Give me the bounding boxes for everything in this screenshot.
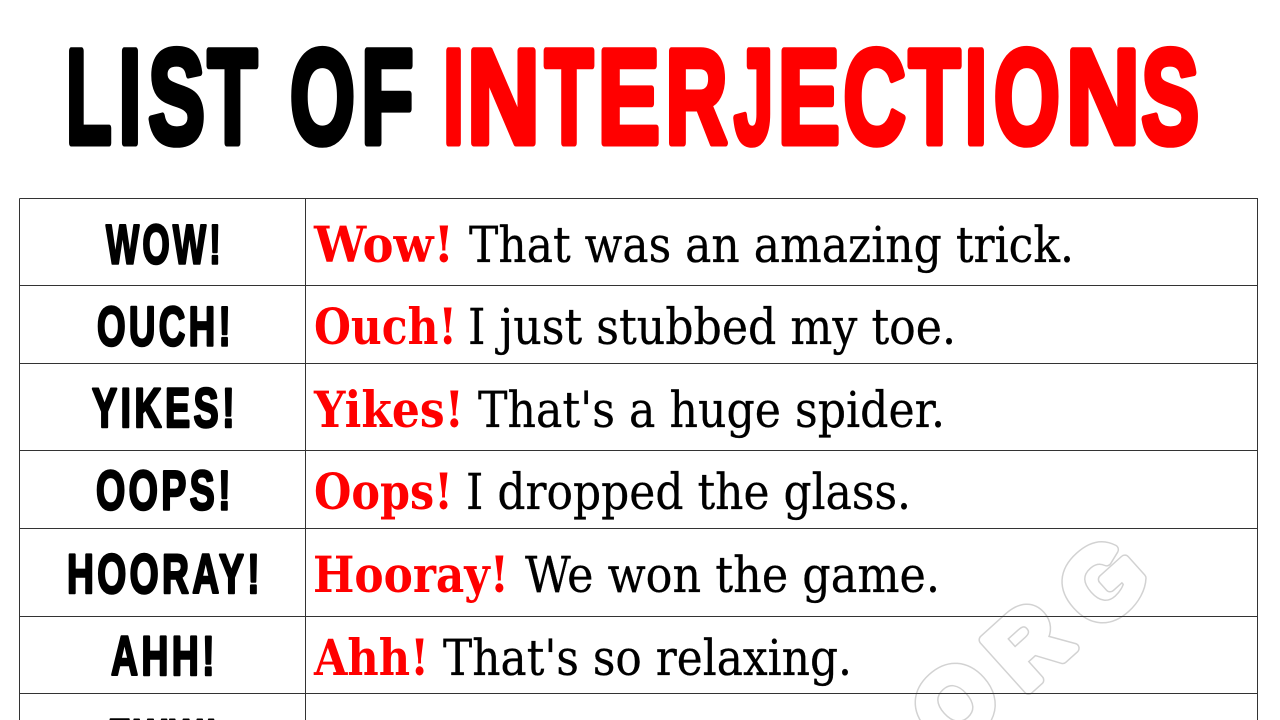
title: I	[965, 23, 987, 172]
title	[66, 23, 1199, 172]
row: Ahh: AHH!	[111, 624, 218, 687]
title: I	[443, 23, 464, 172]
row: Wow: WOW!	[106, 212, 224, 276]
title: L	[66, 23, 112, 172]
row: Ouch	[97, 294, 956, 358]
watermark	[891, 517, 1167, 720]
title: E	[598, 23, 660, 172]
row: Yikes: Yikes!	[313, 380, 464, 439]
row: Ouch: OUCH!	[97, 294, 234, 358]
row: Wow	[106, 212, 1074, 276]
title: T	[909, 23, 960, 172]
row: Hooray: HOORAY!	[67, 542, 263, 605]
title: T	[208, 23, 257, 172]
row: Oops: OOPS!	[96, 458, 234, 522]
row: Hooray: Hooray!	[313, 545, 509, 604]
title: R	[666, 23, 728, 172]
watermark: G	[1038, 517, 1167, 648]
row: Oops: Oops!	[314, 462, 453, 521]
row: Oops: I dropped the glass.	[466, 463, 911, 521]
title: N	[1066, 23, 1140, 172]
row: Yikes: YIKES!	[92, 376, 238, 439]
row: Wow: Wow!	[313, 215, 454, 274]
title: E	[778, 23, 840, 172]
watermark: R	[965, 581, 1090, 709]
title: S	[1141, 23, 1199, 172]
title: J	[734, 23, 773, 172]
row: Hooray	[67, 542, 940, 605]
row: Yikes: That's a huge spider.	[478, 381, 945, 439]
row: Hooray: We won the game.	[525, 546, 940, 604]
title: C	[843, 23, 906, 172]
title: N	[467, 23, 540, 172]
row: Ahh	[111, 624, 852, 687]
row: Ouch: I just stubbed my toe.	[468, 298, 956, 356]
watermark: G	[1038, 517, 1167, 648]
row: Ahh: That's so relaxing.	[443, 629, 852, 687]
watermark: R	[965, 581, 1090, 709]
title: I	[119, 23, 141, 172]
title: S	[148, 23, 205, 172]
row: Ahh: Ahh!	[313, 628, 429, 687]
row: Oops	[96, 458, 911, 522]
title: T	[545, 23, 593, 172]
table grid	[20, 198, 1258, 720]
title: F	[361, 23, 414, 172]
title: O	[290, 23, 355, 172]
row: Ouch: Ouch!	[314, 297, 457, 356]
title: O	[994, 23, 1060, 172]
row: Wow: That was an amazing trick.	[469, 216, 1074, 274]
row: Yikes	[92, 376, 945, 439]
